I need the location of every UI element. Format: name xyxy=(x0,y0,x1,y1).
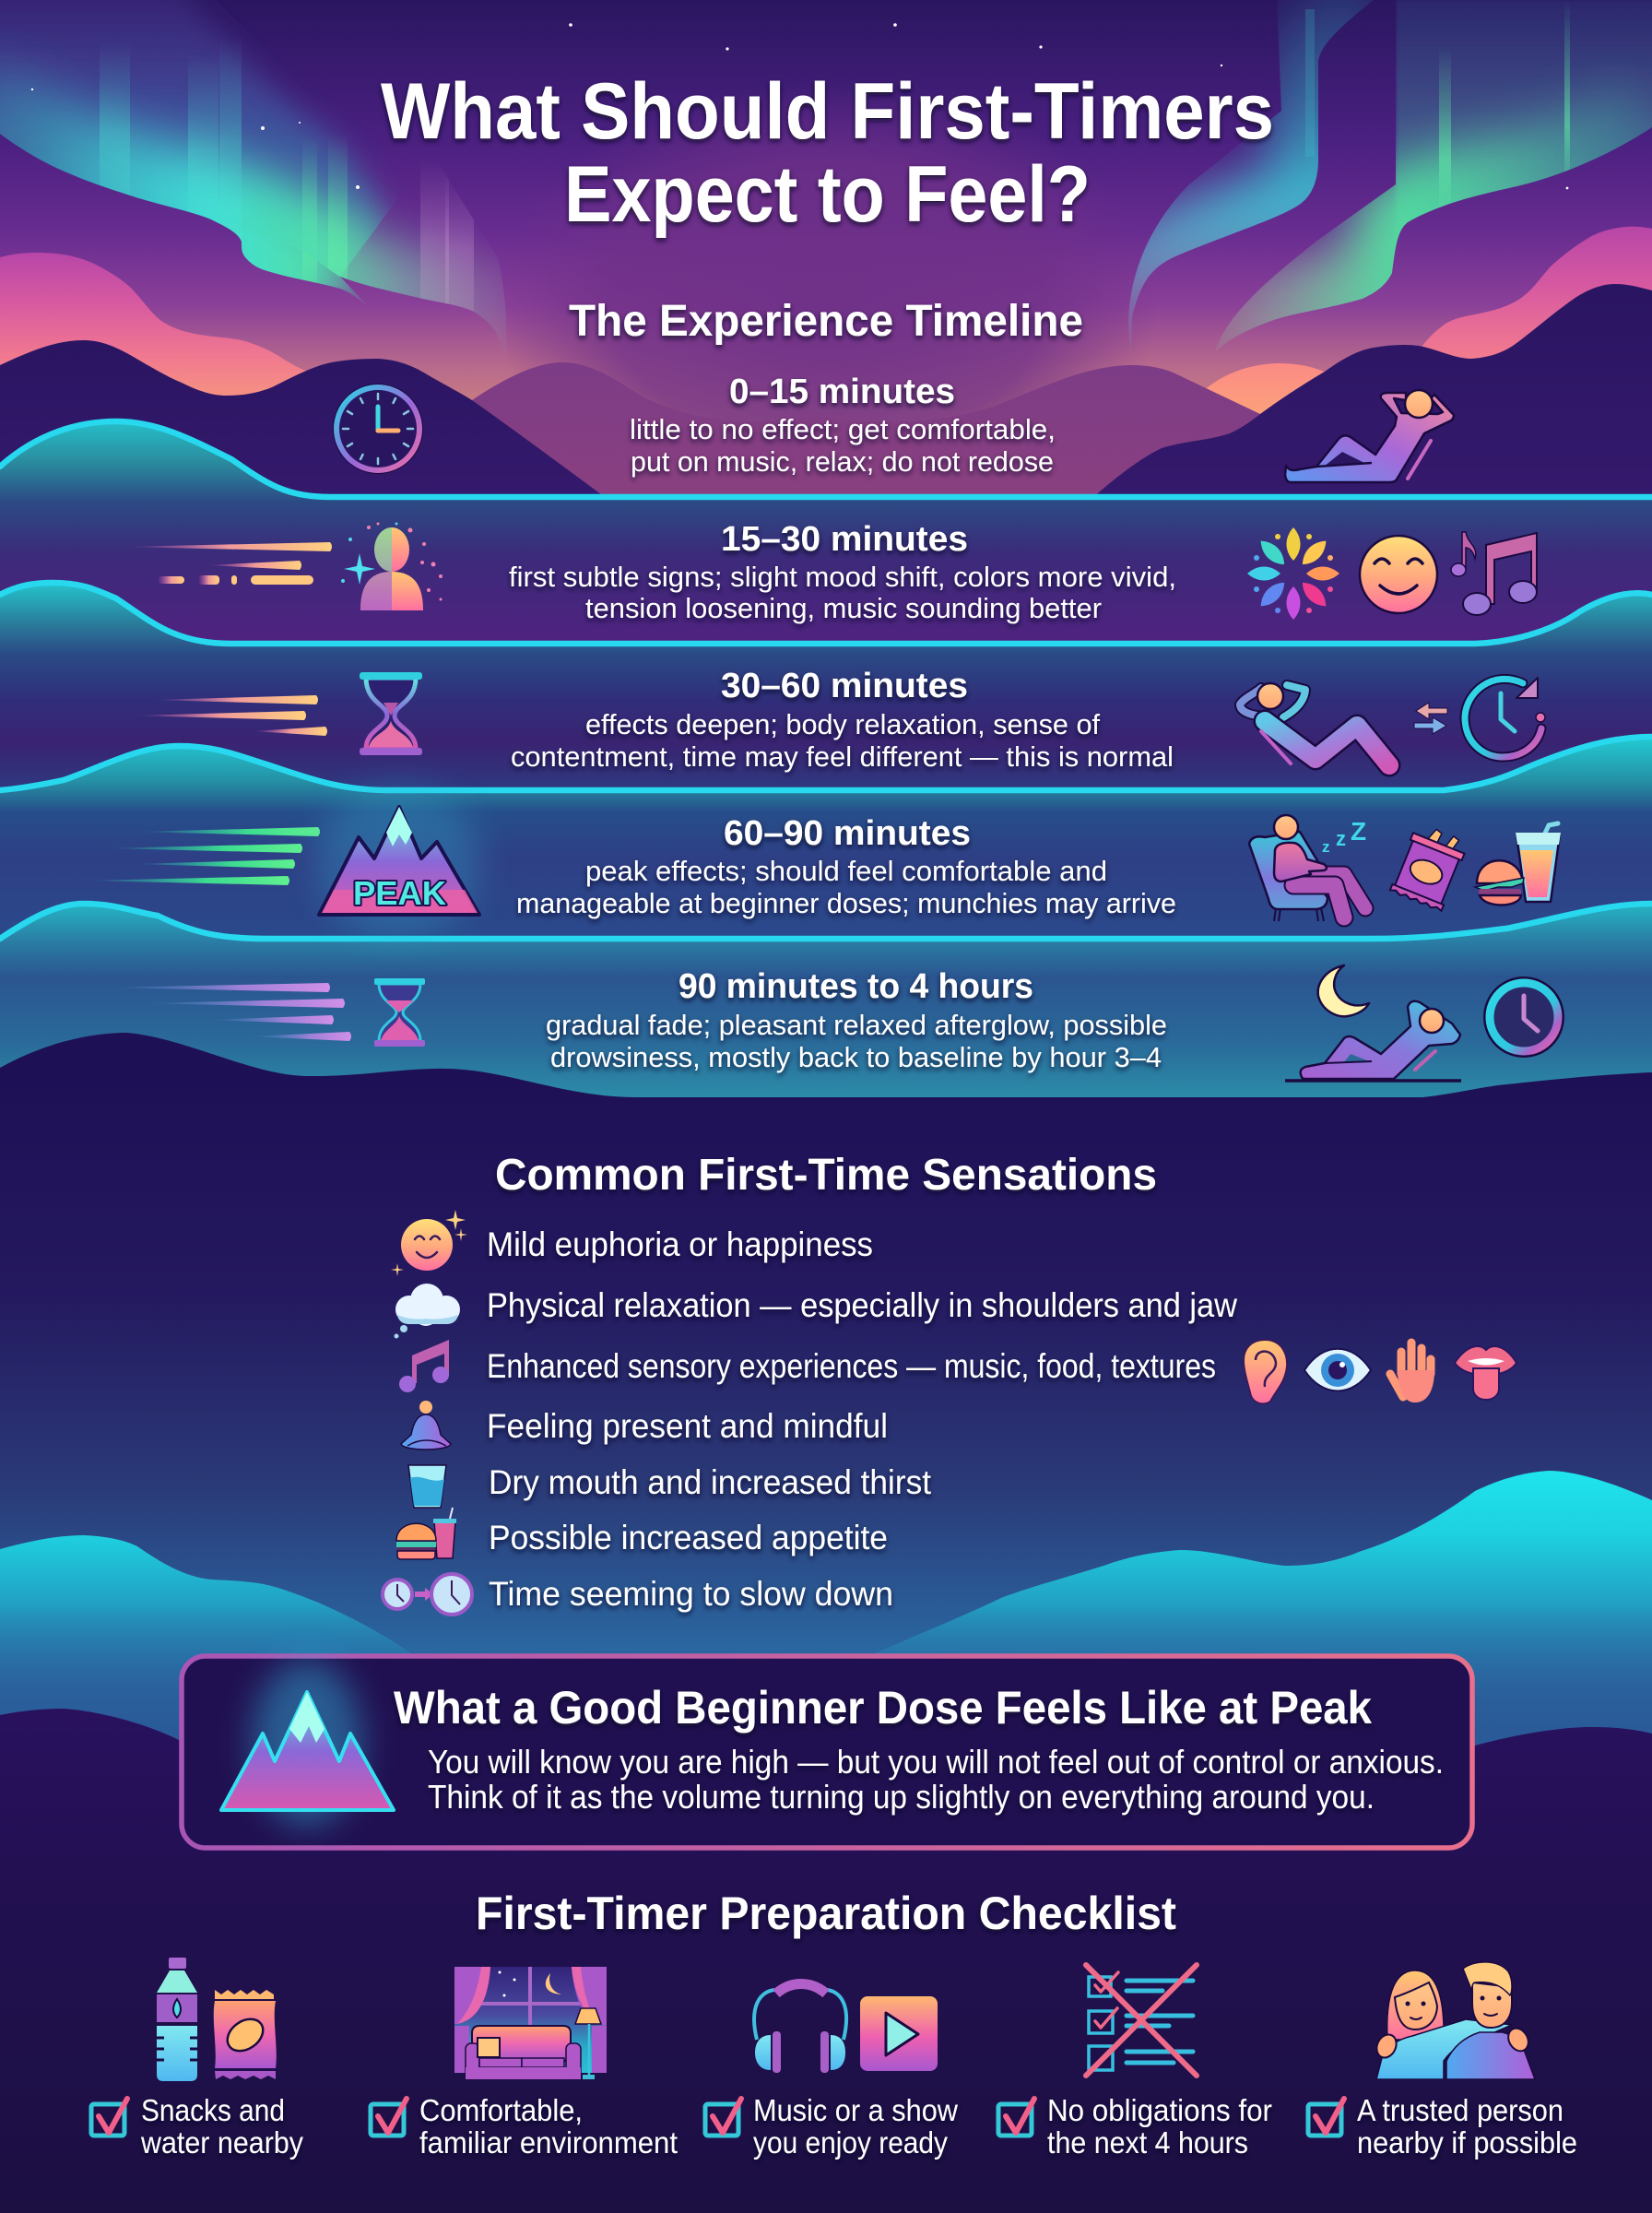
callout text: What a Good Beginner Dose Feels Like at Peak xyxy=(394,1682,1372,1734)
row: 60-90 minutes xyxy=(85,788,1561,936)
icon: sleeper in chair: z xyxy=(1322,838,1329,856)
text block xyxy=(509,520,1176,624)
item: appetite: Possible increased appetite xyxy=(489,1519,888,1556)
checkbox xyxy=(705,2099,741,2136)
pink hills xyxy=(0,253,332,424)
callout panel: beginner dose xyxy=(182,1656,1472,1848)
icon: hourglass xyxy=(374,978,425,1047)
icon: resting person xyxy=(1285,1001,1461,1081)
icon: crossed-out list xyxy=(1086,1965,1197,2076)
icon: glowing mountain xyxy=(221,1660,394,1826)
label: water nearby xyxy=(140,2125,303,2160)
item: dry mouth xyxy=(408,1463,932,1508)
checkbox xyxy=(998,2099,1034,2136)
icon: crescent moon xyxy=(1318,965,1369,1016)
text block: 60–90 minutes xyxy=(724,814,971,853)
lower dark area xyxy=(0,1033,1652,1752)
text block: put on music, relax; do not redose xyxy=(631,445,1054,478)
label xyxy=(419,2093,678,2160)
title: Expect to Feel? xyxy=(564,150,1091,239)
item: time slow: Time seeming to slow down xyxy=(489,1575,893,1613)
text block xyxy=(516,814,1176,919)
icon: mouth xyxy=(1455,1346,1516,1400)
item: euphoria: Mild euphoria or happiness xyxy=(487,1225,873,1263)
icon: smiley xyxy=(1360,536,1437,613)
icon: relaxing person xyxy=(1285,390,1454,482)
icon: clock with arrow xyxy=(1465,678,1545,757)
icon: burger xyxy=(1475,860,1524,905)
icon: living room xyxy=(454,1967,607,2079)
aurora left xyxy=(0,0,498,360)
item: relaxation xyxy=(395,1284,1237,1339)
icon: ear xyxy=(1244,1340,1287,1403)
icon: water bottle xyxy=(157,1958,197,2081)
item: mindful: Feeling present and mindful xyxy=(487,1407,888,1445)
item: music or show xyxy=(705,1984,958,2160)
icons: senses xyxy=(1244,1340,1516,1403)
heading: experience timeline: The Experience Timeline xyxy=(569,297,1083,346)
label: nearby if possible xyxy=(1357,2125,1577,2160)
text block: 90 minutes to 4 hours xyxy=(678,967,1033,1006)
icon: peak mountain: PEAK xyxy=(353,874,446,912)
icon: hand xyxy=(1390,1343,1434,1402)
icon: music notes xyxy=(1451,532,1537,615)
item: sensory: Enhanced sensory experiences — music, food, textures xyxy=(487,1347,1216,1385)
text block: effects deepen; body relaxation, sense of xyxy=(585,708,1100,740)
text block: 15–30 minutes xyxy=(721,520,968,559)
icon: chips bag xyxy=(1389,822,1469,912)
label: you enjoy ready xyxy=(753,2125,948,2160)
item: comfortable environment xyxy=(371,1967,678,2160)
text block: little to no effect; get comfortable, xyxy=(630,413,1056,445)
title: What Should First-Timers xyxy=(381,67,1274,156)
heading: checklist: First-Timer Preparation Checklist xyxy=(476,1888,1176,1939)
text block xyxy=(511,667,1174,773)
text block: contentment, time may feel different — this is normal xyxy=(511,740,1174,773)
label: Comfortable, xyxy=(419,2093,583,2127)
speed streaks xyxy=(85,827,320,885)
text block xyxy=(546,967,1167,1073)
icon: time arrows xyxy=(1414,703,1447,734)
icon: two friends xyxy=(1373,1962,1535,2079)
speed streaks xyxy=(134,695,327,736)
icon: peak mountain xyxy=(315,788,481,936)
sensations list xyxy=(383,1210,1237,1615)
dark hills xyxy=(0,340,608,500)
item: snacks and water xyxy=(91,1958,303,2160)
text block: peak effects; should feel comfortable and xyxy=(585,855,1107,887)
row: 0-15 minutes xyxy=(333,373,1454,482)
checklist xyxy=(91,1958,1577,2160)
row: 90 minutes to 4 hours xyxy=(106,965,1564,1081)
icon: sleeper in chair xyxy=(1249,815,1366,921)
label xyxy=(1357,2093,1577,2160)
item: dry mouth: Dry mouth and increased thirst xyxy=(489,1463,932,1501)
heading: sensations: Common First-Time Sensations xyxy=(495,1151,1157,1200)
row: 30-60 minutes xyxy=(134,667,1545,773)
label xyxy=(753,2093,958,2160)
icon: eye xyxy=(1304,1349,1371,1391)
label: Music or a show xyxy=(753,2093,958,2127)
checkbox xyxy=(371,2099,407,2136)
bottom dark hills xyxy=(0,1709,1652,2213)
text block: 30–60 minutes xyxy=(721,667,968,705)
checkbox xyxy=(91,2099,127,2136)
text block: first subtle signs; slight mood shift, colors more vivid, xyxy=(509,561,1176,593)
label: A trusted person xyxy=(1357,2093,1564,2127)
text block: gradual fade; pleasant relaxed afterglow, possible xyxy=(546,1009,1167,1041)
icon: colorful flower xyxy=(1247,527,1339,620)
item: mindful xyxy=(401,1401,888,1450)
callout text: You will know you are high — but you will not feel out of control or anxious. xyxy=(428,1743,1444,1781)
callout text xyxy=(394,1682,1444,1816)
item: no obligations xyxy=(998,1965,1272,2160)
icon: sleeper in chair: Z xyxy=(1351,817,1366,846)
icon: person with sparkles xyxy=(341,522,442,610)
row: 15-30 minutes xyxy=(124,520,1537,624)
icon: clock xyxy=(333,384,423,474)
mauve mountains xyxy=(472,362,1260,516)
stars xyxy=(31,23,1568,189)
title xyxy=(381,67,1274,239)
text block: manageable at beginner doses; munchies may arrive xyxy=(516,887,1176,919)
callout text: Think of it as the volume turning up slightly on everything around you. xyxy=(428,1778,1375,1816)
icon: headphones xyxy=(754,1984,846,2073)
label: No obligations for xyxy=(1047,2093,1272,2127)
text block: tension loosening, music sounding better xyxy=(585,592,1102,624)
label: Snacks and xyxy=(141,2093,285,2127)
icon: reclining person xyxy=(1240,683,1389,765)
icon: hourglass xyxy=(360,672,422,755)
item: euphoria xyxy=(391,1210,873,1276)
item: appetite xyxy=(396,1508,888,1559)
text block: drowsiness, mostly back to baseline by hour 3–4 xyxy=(550,1041,1162,1073)
item: sensory xyxy=(399,1340,1216,1392)
label: familiar environment xyxy=(419,2125,678,2160)
icon: sleeper in chair: z xyxy=(1336,827,1346,850)
text block xyxy=(630,373,1056,478)
speed streaks xyxy=(106,983,351,1041)
aurora right xyxy=(1131,0,1652,355)
text block: 0–15 minutes xyxy=(729,373,955,411)
speed streaks xyxy=(124,542,332,585)
teal hills xyxy=(793,1471,1652,1706)
label: the next 4 hours xyxy=(1047,2125,1248,2160)
icon: chips xyxy=(214,1990,277,2079)
label xyxy=(140,2093,303,2160)
label xyxy=(1047,2093,1272,2160)
timeline bands xyxy=(0,421,1652,1106)
item: trusted person xyxy=(1308,1962,1577,2160)
item: relaxation: Physical relaxation — especially in shoulders and jaw xyxy=(487,1286,1237,1324)
icon: clock xyxy=(1483,976,1564,1058)
checkbox xyxy=(1308,2099,1344,2136)
icon: play button xyxy=(860,1996,938,2071)
icon: soda cup xyxy=(1516,823,1561,902)
